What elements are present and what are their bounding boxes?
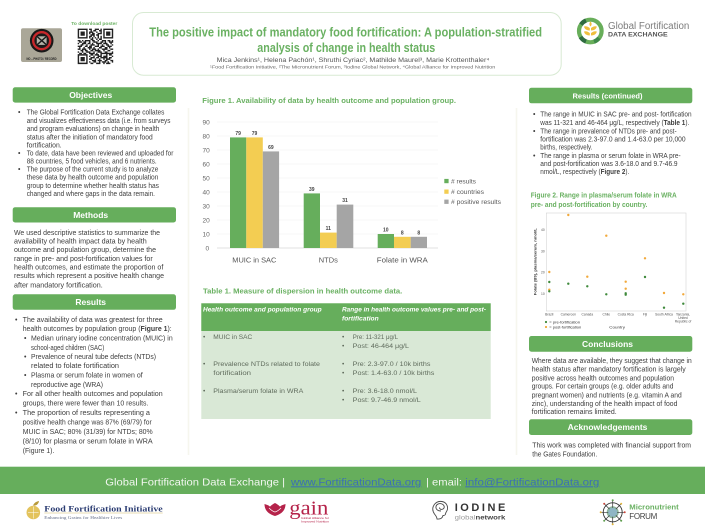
table row: MUIC in SAC: Pre: 11-321 μg/L <box>353 334 398 341</box>
table row: prevalence NTDs: • <box>203 361 206 368</box>
results continued text: The range in plasma or serum folate in WRA pre- <box>540 153 681 160</box>
conclusions text: positive across health outcomes and population <box>532 375 674 382</box>
y axis: 10 <box>541 292 545 296</box>
figure 1 heading: Figure 1. Availability of data by health outcome and population group. <box>202 96 456 105</box>
footer contact band: info@FortificationData.org <box>465 476 599 488</box>
results text: Median urinary iodine concentration (MUIC) in <box>31 336 173 342</box>
panel: methods <box>13 207 176 289</box>
bar chart: 80 <box>202 133 210 140</box>
table row: MUIC in SAC: • <box>203 334 206 341</box>
x axis labels: Country <box>609 326 625 330</box>
bars: folate in WRA <box>377 228 428 264</box>
results continued text: was 11-321 and 46-464 μg/L, respectively (Table 1). <box>539 120 689 127</box>
logo: Global Fortification Data Exchange <box>579 20 689 42</box>
x axis labels: South Africa <box>655 312 673 316</box>
objectives text: To date, data have been reviewed and uploaded for <box>27 150 174 157</box>
x axis labels: Canada <box>582 312 593 316</box>
bars: MUIC in SAC: 69 <box>268 145 274 151</box>
acknowledgements heading <box>529 419 692 435</box>
bars: folate in WRA: Folate in WRA <box>377 255 428 264</box>
table row: plasma/serum folate: Post: 9.7-46.9 nmol/L <box>353 397 421 404</box>
results text: Prevalence of neural tube defects (NTDs) <box>31 354 156 361</box>
objectives text: • <box>18 150 21 157</box>
logo: GAIN: Improved Nutrition <box>301 520 330 524</box>
x axis labels: Brazil <box>545 312 554 316</box>
objectives heading <box>13 87 176 103</box>
methods heading <box>13 207 176 222</box>
logo: Iodine Global Network: global network <box>455 515 506 521</box>
results continued text: nmol/L, respectively (Figure 2). <box>540 169 629 176</box>
table row: MUIC in SAC: MUIC in SAC <box>213 334 253 341</box>
results continued text: • <box>533 112 536 119</box>
conclusions heading <box>529 336 692 352</box>
results text: • <box>15 317 18 324</box>
table row: plasma/serum folate: • <box>342 388 345 395</box>
table row: MUIC in SAC <box>203 334 409 350</box>
results text: groups, there were fewer than 10 results. <box>23 400 148 408</box>
x axis labels <box>545 312 691 330</box>
results continued text: The range in MUIC in SAC pre- and post- fortification <box>540 112 692 119</box>
results text: (8/10) for plasma or serum folate in WRA <box>23 438 153 446</box>
table row: prevalence NTDs: fortification <box>213 370 251 377</box>
footer contact band <box>0 467 705 494</box>
logo: Micronutrient Forum: FORUM <box>629 512 658 521</box>
objectives text: these data by health outcome and population <box>27 175 158 182</box>
bar chart <box>202 119 501 264</box>
results heading <box>13 294 176 310</box>
table heading: Table 1. Measure of dispersion in health outcome data. <box>203 286 402 295</box>
objectives text: The Global Fortification Data Exchange collates <box>27 110 165 117</box>
bars: NTDs: 39 <box>309 187 315 193</box>
conclusions text: pregnant women) and nutrients (e.g. vitamin A and <box>532 393 682 400</box>
table <box>201 303 491 419</box>
logo: Iodine Global Network: IODINE <box>455 502 505 514</box>
results text: • <box>24 336 27 342</box>
bars: MUIC in SAC <box>230 131 279 264</box>
table row: prevalence NTDs: Post: 1.4-63.0 / 10k births <box>353 370 435 377</box>
x axis labels: Tanzania, <box>676 312 690 316</box>
conclusions text: zinc), understanding of the health impact of food <box>532 401 677 408</box>
title <box>149 26 542 55</box>
panel: figure 1 <box>202 96 501 264</box>
chart legend: # positive results <box>451 199 501 206</box>
objectives text: • <box>18 167 21 174</box>
bar chart: 90 <box>202 119 210 126</box>
bars: NTDs: NTDs <box>319 255 338 264</box>
icon: no photo or record sign <box>21 28 62 62</box>
acknowledgements text: This work was completed with financial support from <box>532 442 691 449</box>
results continued text: • <box>533 129 536 136</box>
panel: objectives <box>13 87 176 198</box>
results text: • <box>15 391 18 398</box>
conclusions text <box>532 358 692 416</box>
y axis <box>533 227 545 296</box>
table row: MUIC in SAC: • <box>342 343 345 350</box>
figure 2 heading: Figure 2. Range in plasma/serum folate in WRA <box>531 191 677 200</box>
results text: health outcomes by population group (Figure 1): <box>23 326 172 333</box>
authors: Mica Jenkins¹, Helena Pachón¹, Shruthi Cyriac², Mathilde Maurel³, Marie Krottenthaler⁴ <box>217 57 490 64</box>
table row: plasma/serum folate: • <box>203 388 206 395</box>
results text: positive health change was 87% (69/79) for <box>23 420 152 426</box>
table row: MUIC in SAC: • <box>342 334 345 341</box>
bars: MUIC in SAC: MUIC in SAC <box>232 255 277 264</box>
conclusions text: Where data are available, they suggest that change in <box>532 358 692 365</box>
scatter legend: = pre-fortification <box>549 320 580 324</box>
results text: The availability of data was greatest for three <box>23 317 163 324</box>
methods text: after mandatory fortification. <box>14 282 103 289</box>
results text: (Figure 1). <box>23 448 54 455</box>
results text: school-aged children (SAC) <box>31 345 104 352</box>
objectives text: changed and where gaps in the data remain. <box>27 191 155 198</box>
panel: conclusions <box>529 336 692 416</box>
results text: related to folate fortification <box>31 363 119 370</box>
logo: Micronutrient Forum: Micronutrient <box>629 502 679 511</box>
objectives heading: Objectives <box>69 90 112 100</box>
objectives text: and program evaluations) on change in health <box>27 126 159 133</box>
bars: NTDs: 11 <box>326 226 331 232</box>
results continued text: fortification was 2.3-97.0 and 1.4-63.0 per 10,000 <box>540 137 686 144</box>
table row: prevalence NTDs: Prevalence NTDs related to folate <box>213 361 320 368</box>
results text <box>15 317 173 455</box>
conclusions heading: Conclusions <box>582 339 633 349</box>
table header row <box>201 303 491 331</box>
objectives text: status after the initiation of mandatory food <box>27 134 153 141</box>
objectives text <box>18 110 174 198</box>
title panel <box>132 12 561 75</box>
bar chart: 40 <box>202 189 210 196</box>
results continued heading <box>529 88 692 103</box>
results text: • <box>24 354 27 361</box>
conclusions text: health status after mandatory fortification is largely <box>532 367 686 374</box>
title: The positive impact of mandatory food fortification: A population-stratified <box>149 26 542 40</box>
table row: plasma/serum folate: Pre: 3.6-18.0 nmol/L <box>353 388 417 395</box>
bars: MUIC in SAC: 79 <box>252 131 257 137</box>
results continued text: and post-fortification was 3.6-18.0 and 9.7-46.9 <box>540 161 678 168</box>
bars: MUIC in SAC: 79 <box>235 131 241 137</box>
scatter legend: = post-fortification <box>549 325 581 329</box>
table row: prevalence NTDs: • <box>342 361 345 368</box>
logo: GAIN: gain <box>289 498 328 520</box>
bar chart: 10 <box>202 231 210 238</box>
bar chart: 30 <box>202 203 210 210</box>
panel: figure 2 <box>531 191 691 330</box>
logo: Iodine Global Network <box>433 501 506 521</box>
x axis labels: United <box>678 316 688 320</box>
results continued text: births, respectively. <box>540 145 592 152</box>
results continued text: The range in prevalence of NTDs pre- and post- <box>540 129 677 136</box>
acknowledgements heading: Acknowledgements <box>568 422 648 432</box>
results text: Plasma or serum folate in women of <box>31 372 143 380</box>
figure 2 heading: pre- and post-fortification by country. <box>531 200 647 209</box>
panel: results continued <box>529 88 692 176</box>
results text: • <box>15 410 18 417</box>
bar chart: 70 <box>202 147 210 154</box>
QR code with download label: To download poster <box>71 21 117 26</box>
table row: prevalence NTDs: Pre: 2.3-97.0 / 10k births <box>353 361 431 368</box>
conclusions text: fortification remains limited. <box>532 409 617 416</box>
table header row: Range in health outcome values pre- and post- <box>342 306 486 313</box>
objectives text: and visualizes effectiveness data (i.e. from surveys <box>27 118 171 125</box>
methods text: availability of health impact data by health <box>14 238 147 246</box>
logo: Global Fortification Data Exchange: DATA EXCHANGE <box>608 32 668 38</box>
results text: • <box>24 372 27 380</box>
x axis labels: Cameroon <box>561 312 576 316</box>
results text: For all other health outcomes and population <box>23 391 163 398</box>
methods text: We used descriptive statistics to summarize the <box>14 230 160 237</box>
methods text <box>14 230 164 289</box>
logo: Food Fortification Initiative <box>26 501 163 520</box>
table row: plasma/serum folate: • <box>342 397 345 404</box>
y axis: Folate (B9), plasma/serum, nmol/L <box>533 227 537 295</box>
results text: The proportion of results representing a <box>23 410 150 417</box>
bar chart: 20 <box>202 217 210 224</box>
methods heading: Methods <box>73 210 108 220</box>
acknowledgements text <box>532 442 691 458</box>
results text: MUIC in SAC; 80% (31/39) for NTDs; 80% <box>23 429 153 436</box>
chart legend <box>444 178 501 206</box>
table row: prevalence NTDs: • <box>342 370 345 377</box>
table row: plasma/serum folate: Plasma/serum folate in WRA <box>213 388 304 395</box>
results continued text <box>533 112 692 176</box>
x axis labels: Chile <box>603 312 610 316</box>
acknowledgements text: the Gates Foundation. <box>532 451 597 458</box>
logo: Micronutrient Forum <box>600 499 679 525</box>
x axis labels: Costa Rica <box>618 312 634 316</box>
logo: GAIN <box>264 498 330 524</box>
icon: no photo or record sign: NO – PHOTO / RECORD <box>26 57 57 61</box>
y axis: 30 <box>541 249 545 253</box>
y axis: 20 <box>541 271 545 275</box>
objectives text: 88 countries, 5 food vehicles, and 6 nutrients. <box>27 159 157 166</box>
panel: results <box>13 294 176 455</box>
bar chart: 50 <box>202 175 210 182</box>
footer contact band: | email: <box>426 476 462 488</box>
chart legend: # countries <box>451 189 484 196</box>
bar chart: 60 <box>202 161 210 168</box>
bars: NTDs: 31 <box>342 198 348 204</box>
chart legend: # results <box>451 178 476 185</box>
conclusions text: groups. For certain groups (e.g. older adults and <box>532 384 673 391</box>
table row: MUIC in SAC: Post: 46-464 μg/L <box>353 343 409 350</box>
methods text: outcome and population group, determine the <box>14 247 156 254</box>
results text: reproductive age (WRA) <box>31 382 103 389</box>
x axis labels: Fiji <box>643 312 647 316</box>
logo: Food Fortification Initiative: Enhancing Grains for Healthier Lives <box>44 515 123 520</box>
bars: folate in WRA: 10 <box>383 228 389 234</box>
logo: GAIN: Global Alliance for <box>301 516 329 520</box>
affiliations: ¹Food Fortification Initiative, ²The Micronutrient Forum, ³Iodine Global Network, ⁴Global Alliance for Improved Nutrition <box>210 64 496 69</box>
objectives text: fortification. <box>27 142 62 149</box>
scatter legend <box>545 320 581 329</box>
objectives text: • <box>18 110 21 117</box>
pre-fortification points <box>548 276 684 309</box>
bars: NTDs <box>304 187 353 264</box>
table row: plasma/serum folate <box>203 388 421 404</box>
results heading: Results <box>75 297 106 307</box>
objectives text: The purpose of the current study is to analyze <box>27 167 158 174</box>
panel: acknowledgements <box>529 419 692 458</box>
scatter plot <box>533 213 691 330</box>
methods text: range in pre- and post-fortification values for <box>14 256 153 263</box>
panel: table 1 <box>201 286 491 419</box>
bar chart: 0 <box>206 245 210 252</box>
table row: prevalence NTDs <box>203 361 435 377</box>
methods text: results which represent a positive health change <box>14 273 164 280</box>
methods text: health outcomes, and estimate the proportion of <box>14 264 163 272</box>
objectives text: group to determine whether health status has <box>27 183 159 190</box>
y axis: 40 <box>541 228 545 232</box>
bars: folate in WRA: 8 <box>401 230 404 236</box>
footer contact band: Global Fortification Data Exchange | <box>105 476 285 488</box>
bars: folate in WRA: 8 <box>417 230 420 236</box>
post-fortification points <box>548 214 684 295</box>
footer contact band: www.FortificationData.org <box>290 476 421 488</box>
logo: Global Fortification Data Exchange: Global Fortification <box>608 21 689 32</box>
table header row: Health outcome and population group <box>203 306 322 313</box>
figure 2 heading <box>531 191 677 209</box>
x axis labels: Republic of <box>675 320 691 324</box>
title: analysis of change in health status <box>257 41 435 55</box>
logo: Food Fortification Initiative: Food Fortification Initiative <box>44 504 163 514</box>
table header row: fortification <box>342 315 379 322</box>
QR code with download label <box>71 21 117 63</box>
results continued text: • <box>533 153 536 160</box>
results continued heading: Results (continued) <box>572 91 643 100</box>
